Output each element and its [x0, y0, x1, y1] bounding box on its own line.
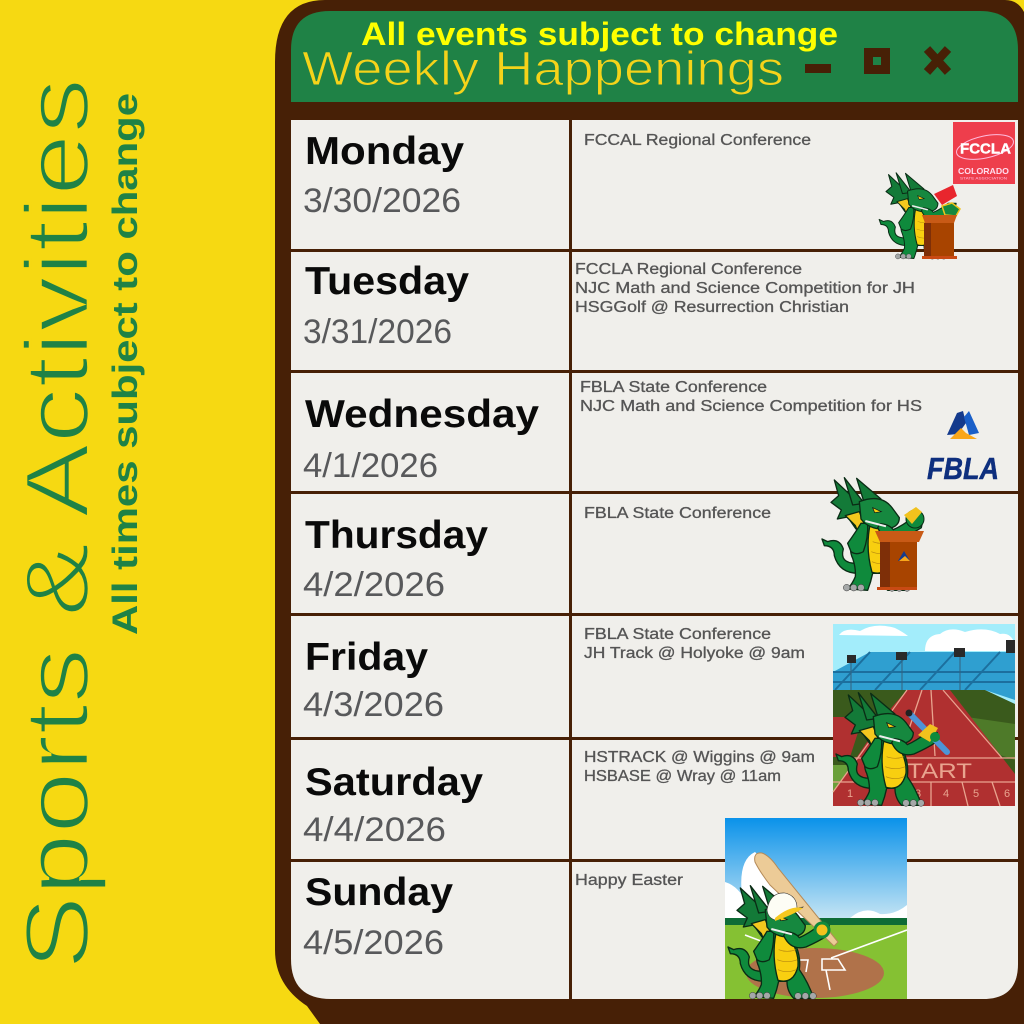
row: Friday: FBLA State Conference [584, 626, 771, 643]
row: Saturday: Saturday [305, 761, 483, 804]
lane numbers [847, 788, 1010, 800]
row: Tuesday [303, 260, 915, 351]
logo: FCCLA Colorado: STATE ASSOCIATION [960, 176, 1008, 180]
row: Thursday [303, 505, 771, 604]
illustration: track scene with dragon [833, 624, 1015, 806]
lane numbers: 5 [973, 788, 979, 800]
row: Wednesday: NJC Math and Science Competition for HS [580, 398, 922, 415]
hands [815, 923, 829, 937]
row: Tuesday: FCCLA Regional Conference [575, 261, 802, 278]
running track [833, 690, 1015, 806]
lane numbers: 1 [847, 788, 853, 800]
row: Sunday: Happy Easter [575, 872, 683, 889]
row: Sunday: 4/5/2026 [303, 924, 444, 962]
podium [922, 215, 957, 259]
baton [906, 710, 947, 752]
cap [767, 893, 803, 920]
logo: FBLA [927, 411, 999, 486]
icon: close [927, 49, 948, 72]
megaphone [934, 185, 957, 205]
row: Monday: Monday [305, 130, 464, 173]
row: Friday [303, 626, 805, 724]
lane numbers: 6 [1004, 788, 1010, 800]
infield dirt [746, 948, 884, 998]
fist [942, 203, 960, 216]
lane numbers: 3 [915, 788, 921, 800]
illustration: dragon at FBLA podium [822, 478, 924, 591]
row: Friday: 4/3/2026 [303, 686, 444, 724]
header bar [291, 11, 1018, 102]
header title: Weekly Happenings [302, 43, 784, 96]
row: Thursday: 4/2/2026 [303, 566, 445, 604]
row: Thursday: Thursday [305, 514, 488, 557]
row: Thursday: FBLA State Conference [584, 505, 771, 522]
row: Tuesday: HSGGolf @ Resurrection Christian [575, 299, 849, 316]
row: Tuesday: Tuesday [305, 260, 469, 303]
logo: FBLA: FBLA [927, 451, 999, 486]
row: Saturday: HSBASE @ Wray @ 11am [584, 768, 781, 785]
schedule table cells [291, 120, 1018, 999]
sky [833, 624, 1015, 806]
base lines [745, 930, 907, 990]
row: Saturday: 4/4/2026 [303, 811, 446, 849]
row: Wednesday: FBLA State Conference [580, 379, 767, 396]
vertical subtitle: All times subject to change: All times subject to change [106, 93, 145, 635]
illustration: baseball scene with dragon [725, 818, 907, 999]
row: Saturday: HSTRACK @ Wiggins @ 9am [584, 749, 815, 766]
header notice: All events subject to change [361, 16, 838, 52]
row: Monday: 3/30/2026 [303, 182, 461, 220]
dragon [836, 693, 937, 806]
track label: START [890, 760, 972, 783]
icon: minimize [805, 64, 831, 73]
row: Sunday [303, 871, 683, 962]
lane numbers: 4 [943, 788, 949, 800]
grass field [725, 925, 907, 999]
row: Wednesday: 4/1/2026 [303, 447, 438, 485]
row: Monday: FCCAL Regional Conference [584, 132, 811, 149]
icon: maximize [864, 48, 890, 74]
row: Tuesday: NJC Math and Science Competition for JH [575, 280, 915, 297]
stadium lights [847, 640, 1015, 663]
vertical title: Sports & Activities: Sports & Activities [8, 78, 108, 970]
grandstand [833, 652, 1015, 700]
row: Tuesday: 3/31/2026 [303, 313, 452, 351]
row: Monday [303, 130, 811, 220]
row: Wednesday: Wednesday [305, 393, 539, 436]
row: Friday: JH Track @ Holyoke @ 9am [584, 645, 805, 662]
brown window frame [275, 0, 1024, 1024]
outfield wall [725, 918, 907, 925]
row: Saturday [303, 749, 815, 849]
logo: FCCLA Colorado: COLORADO [958, 166, 1009, 176]
baseball bat [755, 853, 838, 946]
sky [725, 818, 907, 923]
row: Friday: Friday [305, 636, 428, 679]
lane lines [833, 690, 1015, 806]
dragon [728, 886, 829, 999]
illustration: dragon at FCCLA podium [879, 173, 960, 259]
grass [833, 690, 1015, 806]
row: Wednesday [303, 379, 922, 485]
clouds [839, 626, 1015, 651]
podium [875, 531, 924, 590]
clouds [725, 852, 805, 918]
logo: FCCLA Colorado [953, 122, 1016, 184]
logo: FCCLA Colorado: FCCLA [960, 142, 1012, 158]
row: Sunday: Sunday [305, 871, 453, 914]
fist [904, 507, 924, 528]
